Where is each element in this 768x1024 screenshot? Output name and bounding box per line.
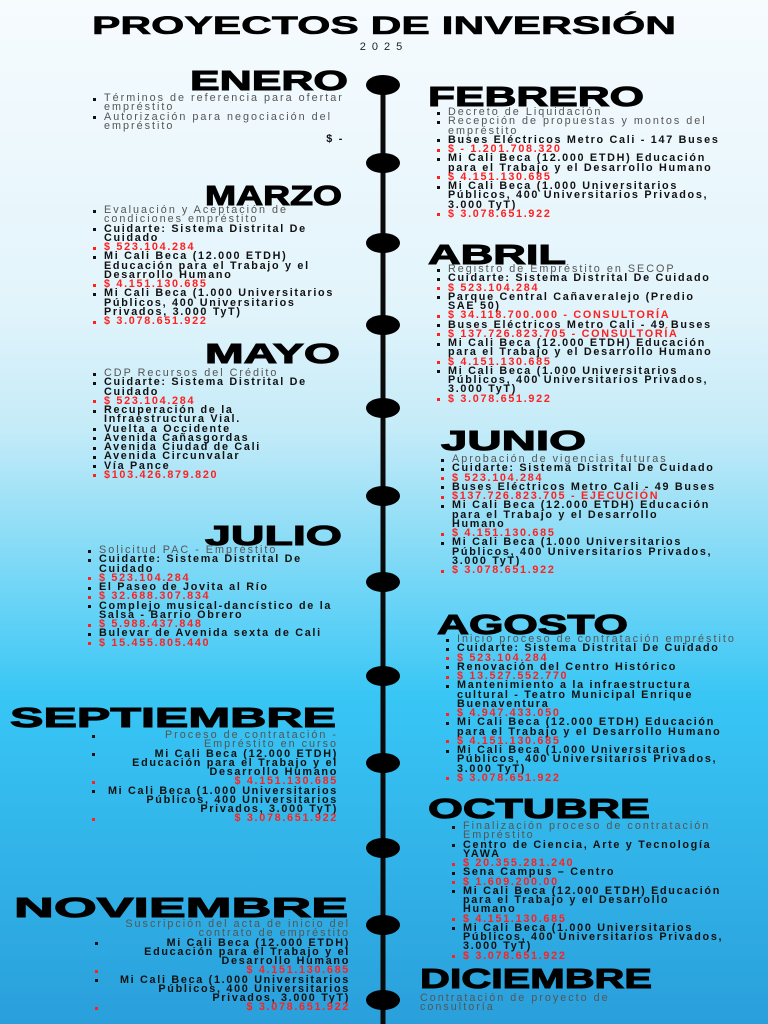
year: 2025 xyxy=(360,41,408,53)
text: julio: $ 15.455.805.440 xyxy=(99,636,210,648)
text: mayo: $ 523.104.284 xyxy=(104,395,195,407)
text: octubre: Mi Cali Beca (12.000 ETDH) Educación xyxy=(463,885,721,897)
text: octubre: Empréstito xyxy=(463,829,535,841)
text: octubre: Sena Campus – Centro xyxy=(463,866,615,878)
text: octubre: Centro de Ciencia, Arte y Tecnología xyxy=(463,838,711,850)
heading: marzo: MARZO xyxy=(205,180,342,211)
text: febrero: empréstito xyxy=(448,124,518,136)
text: octubre: Mi Cali Beca (1.000 Universitarios xyxy=(463,922,693,934)
text: mayo xyxy=(93,367,307,481)
text: noviembre: Privados, 3.000 TyT) xyxy=(212,992,350,1004)
text: julio: Complejo musical-dancístico de la xyxy=(99,600,332,612)
text: mayo: Vuelta a Occidente xyxy=(104,422,231,434)
text: julio: Cuidarte: Sistema Distrital De xyxy=(99,553,302,565)
text: marzo: Desarrollo Humano xyxy=(104,269,232,281)
text: noviembre xyxy=(95,918,350,1013)
text: octubre: 3.000 TyT) xyxy=(463,940,532,952)
text: marzo: $ 523.104.284 xyxy=(104,241,195,253)
text: julio: Salsa - Barrio Obrero xyxy=(99,609,243,621)
text: diciembre xyxy=(420,992,610,1013)
text: marzo: Educación para el Trabajo y el xyxy=(104,260,310,272)
text: marzo: condiciones empréstito xyxy=(104,213,258,225)
text: junio: Buses Eléctricos Metro Cali - 49 Buses xyxy=(452,481,716,493)
text: abril: para el Trabajo y el Desarrollo Humano xyxy=(448,346,712,358)
text: septiembre: $ 3.078.651.922 xyxy=(234,812,338,824)
text: abril: $ 137.726.823.705 - CONSULTORÍA xyxy=(448,328,679,340)
text: octubre xyxy=(452,820,723,962)
text: febrero: $ 4.151.130.685 xyxy=(448,171,552,183)
text: agosto: $ 4.151.130.685 xyxy=(457,735,561,747)
text: junio xyxy=(441,453,716,576)
text: febrero: para el Trabajo y el Desarrollo Humano xyxy=(448,162,712,174)
text: noviembre: Mi Cali Beca (1.000 Universitarios xyxy=(120,974,350,986)
text: julio: Bulevar de Avenida sexta de Cali xyxy=(99,627,322,639)
text: julio: $ 5.988.437.848 xyxy=(99,618,203,630)
text: enero: empréstito xyxy=(104,120,174,132)
heading: febrero: FEBRERO xyxy=(428,81,644,112)
text: octubre: Finalización proceso de contratación xyxy=(463,820,710,832)
text: julio: Solicitud PAC - Empréstito xyxy=(99,544,277,556)
text: octubre: para el Trabajo y el Desarrollo xyxy=(463,894,669,906)
text: febrero: Recepción de propuestas y montos del xyxy=(448,115,707,127)
text: junio: 3.000 TyT) xyxy=(452,555,521,567)
text: mayo: Infraestructura Vial. xyxy=(104,413,241,425)
text: octubre: $ 4.151.130.685 xyxy=(463,912,567,924)
text: abril: Mi Cali Beca (12.000 ETDH) Educación xyxy=(448,337,706,349)
text: agosto: Cuidarte: Sistema Distrital De Cuidado xyxy=(457,642,720,654)
text: febrero: Decreto de Liquidación xyxy=(448,106,602,118)
text: enero: $ - xyxy=(326,133,344,145)
text: marzo: Cuidado xyxy=(104,232,159,244)
heading: enero: ENERO xyxy=(190,65,348,96)
text: noviembre: Mi Cali Beca (12.000 ETDH) xyxy=(167,936,350,948)
text: diciembre: Contratación de proyecto de xyxy=(420,992,610,1004)
text: mayo: Vía Pance xyxy=(104,460,170,472)
text: agosto: $ 3.078.651.922 xyxy=(457,772,561,784)
text: octubre: Humano xyxy=(463,903,516,915)
text: septiembre: Públicos, 400 Universitarios xyxy=(146,794,338,806)
text: abril: $ 3.078.651.922 xyxy=(448,392,552,404)
text: agosto: Públicos, 400 Universitarios Privados, xyxy=(457,753,717,765)
text: agosto: $ 523.104.284 xyxy=(457,652,548,664)
text: septiembre: Mi Cali Beca (12.000 ETDH) xyxy=(155,748,338,760)
text: abril: Buses Eléctricos Metro Cali - 49 Buses xyxy=(448,318,712,330)
text: marzo: Mi Cali Beca (12.000 ETDH) xyxy=(104,250,287,262)
text: junio: Públicos, 400 Universitarios Privados, xyxy=(452,546,712,558)
text: octubre: $ 20.355.281.240 xyxy=(463,857,574,869)
text: julio xyxy=(88,544,332,648)
text: septiembre: Mi Cali Beca (1.000 Universitarios xyxy=(108,784,338,796)
text: noviembre: Públicos, 400 Universitarios xyxy=(158,983,350,995)
text: julio: $ 523.104.284 xyxy=(99,572,190,584)
text: noviembre: Desarrollo Humano xyxy=(222,955,350,967)
text: marzo xyxy=(93,204,334,327)
heading: julio: JULIO xyxy=(205,520,342,551)
text: agosto: Renovación del Centro Histórico xyxy=(457,661,677,673)
text: marzo: $ 4.151.130.685 xyxy=(104,278,208,290)
text: mayo: $103.426.879.820 xyxy=(104,469,218,481)
text: mayo: Cuidado xyxy=(104,386,159,398)
text: mayo: Avenida Cañasgordas xyxy=(104,432,249,444)
text: agosto: Inicio proceso de contratación empréstito xyxy=(457,633,736,645)
text: agosto: Mi Cali Beca (1.000 Universitarios xyxy=(457,744,687,756)
text: febrero: $ - 1.201.708.320 xyxy=(448,143,562,155)
text: julio: El Paseo de Jovita al Río xyxy=(99,581,269,593)
text: junio: $ 3.078.651.922 xyxy=(452,564,556,576)
text: octubre: Públicos, 400 Universitarios Privados, xyxy=(463,931,723,943)
text: enero xyxy=(93,92,344,145)
text: abril: Cuidarte: Sistema Distrital De Cuidado xyxy=(448,272,711,284)
text: octubre: $ 3.078.651.922 xyxy=(463,950,567,962)
text: abril: SAE 50) xyxy=(448,300,501,312)
text: diciembre: consultoría xyxy=(420,1001,495,1013)
text: enero: Términos de referencia para ofertar xyxy=(104,92,344,104)
text: junio: Aprobación de vigencias futuras xyxy=(452,453,668,465)
text: abril: $ 4.151.130.685 xyxy=(448,356,552,368)
text: julio: Cuidado xyxy=(99,562,154,574)
text: agosto: Mantenimiento a la infraestructura xyxy=(457,679,691,691)
text: agosto: Buenaventura xyxy=(457,698,549,710)
text: junio: Cuidarte: Sistema Distrital De Cuidado xyxy=(452,462,715,474)
text: abril: 3.000 TyT) xyxy=(448,383,517,395)
text: enero: Autorización para negociación del xyxy=(104,110,332,122)
text: enero: empréstito xyxy=(104,101,174,113)
text: marzo: Evaluación y Aceptación de xyxy=(104,204,288,216)
text: octubre: YAWA xyxy=(463,848,501,860)
text: febrero: Buses Eléctricos Metro Cali - 147 Buses xyxy=(448,134,720,146)
heading: mayo: MAYO xyxy=(205,338,340,369)
text: junio: para el Trabajo y el Desarrollo xyxy=(452,508,658,520)
text: junio: Mi Cali Beca (12.000 ETDH) Educación xyxy=(452,499,710,511)
text: agosto: Mi Cali Beca (12.000 ETDH) Educación xyxy=(457,716,715,728)
text: julio: $ 32.688.307.834 xyxy=(99,590,210,602)
heading: agosto: AGOSTO xyxy=(437,609,628,640)
text: mayo: Cuidarte: Sistema Distrital De xyxy=(104,376,307,388)
text: abril xyxy=(437,263,712,404)
text: mayo: CDP Recursos del Crédito xyxy=(104,367,278,379)
text: noviembre: Educación para el Trabajo y el xyxy=(144,946,350,958)
heading: diciembre: DICIEMBRE xyxy=(420,963,652,994)
text: septiembre: Desarrollo Humano xyxy=(210,766,338,778)
text: septiembre xyxy=(92,729,338,824)
text: noviembre: contrato de empréstito xyxy=(199,927,350,939)
text: noviembre: $ 4.151.130.685 xyxy=(246,964,350,976)
text: febrero: $ 3.078.651.922 xyxy=(448,208,552,220)
text: marzo: Cuidarte: Sistema Distrital De xyxy=(104,222,307,234)
text: abril: $ 523.104.284 xyxy=(448,282,539,294)
text: febrero: Mi Cali Beca (12.000 ETDH) Educación xyxy=(448,152,706,164)
heading: abril: ABRIL xyxy=(428,239,566,270)
text: septiembre: $ 4.151.130.685 xyxy=(234,775,338,787)
text: agosto xyxy=(446,633,736,784)
text: marzo: Privados, 3.000 TyT) xyxy=(104,306,242,318)
text: agosto: $ 13.527.552.770 xyxy=(457,670,568,682)
text: marzo: Públicos, 400 Universitarios xyxy=(104,296,296,308)
text: abril: Parque Central Cañaveralejo (Predio xyxy=(448,291,695,303)
text: febrero: Públicos, 400 Universitarios Privados, xyxy=(448,189,708,201)
text: agosto: para el Trabajo y el Desarrollo Humano xyxy=(457,726,721,738)
text: mayo: Recuperación de la xyxy=(104,404,234,416)
text: febrero: 3.000 TyT) xyxy=(448,198,517,210)
text: marzo: $ 3.078.651.922 xyxy=(104,315,208,327)
title: PROYECTOS DE INVERSIÓN xyxy=(92,10,676,40)
heading: septiembre: SEPTIEMBRE xyxy=(10,702,336,733)
text: febrero xyxy=(437,106,720,220)
text: febrero: Mi Cali Beca (1.000 Universitarios xyxy=(448,180,678,192)
text: agosto: cultural - Teatro Municipal Enrique xyxy=(457,688,693,700)
text: abril: Mi Cali Beca (1.000 Universitarios xyxy=(448,365,678,377)
text: octubre: $ 1.609.200.00 xyxy=(463,876,559,888)
text: mayo: Avenida Ciudad de Cali xyxy=(104,441,261,453)
text: agosto: 3.000 TyT) xyxy=(457,762,526,774)
text: septiembre: Proceso de contratación - xyxy=(165,729,338,741)
heading: junio: JUNIO xyxy=(441,425,586,456)
text: junio: $137.726.823.705 - EJECUCIÓN xyxy=(452,490,659,502)
text: mayo: Avenida Circunvalar xyxy=(104,450,240,462)
text: noviembre: $ 3.078.651.922 xyxy=(246,1001,350,1013)
text: marzo: Mi Cali Beca (1.000 Universitarios xyxy=(104,287,334,299)
text: junio: $ 4.151.130.685 xyxy=(452,527,556,539)
text: septiembre: Empréstito en curso xyxy=(204,738,338,750)
heading: octubre: OCTUBRE xyxy=(428,793,650,824)
heading: noviembre: NOVIEMBRE xyxy=(14,892,348,923)
text: abril: $ 34.118.700.000 - CONSULTORÍA xyxy=(448,309,670,321)
text: septiembre: Privados, 3.000 TyT) xyxy=(200,803,338,815)
text: junio: Mi Cali Beca (1.000 Universitarios xyxy=(452,536,682,548)
text: abril: Públicos, 400 Universitarios Privados, xyxy=(448,374,708,386)
text: abril: Registro de Empréstito en SECOP xyxy=(448,263,676,275)
text: junio: $ 523.104.284 xyxy=(452,472,543,484)
text: junio: Humano xyxy=(452,518,505,530)
text: noviembre: Suscripción del acta de inicio del xyxy=(125,918,350,930)
text: septiembre: Educación para el Trabajo y el xyxy=(132,757,338,769)
text: agosto: $ 4.947.433.050 xyxy=(457,707,561,719)
timeline line xyxy=(366,75,400,1024)
